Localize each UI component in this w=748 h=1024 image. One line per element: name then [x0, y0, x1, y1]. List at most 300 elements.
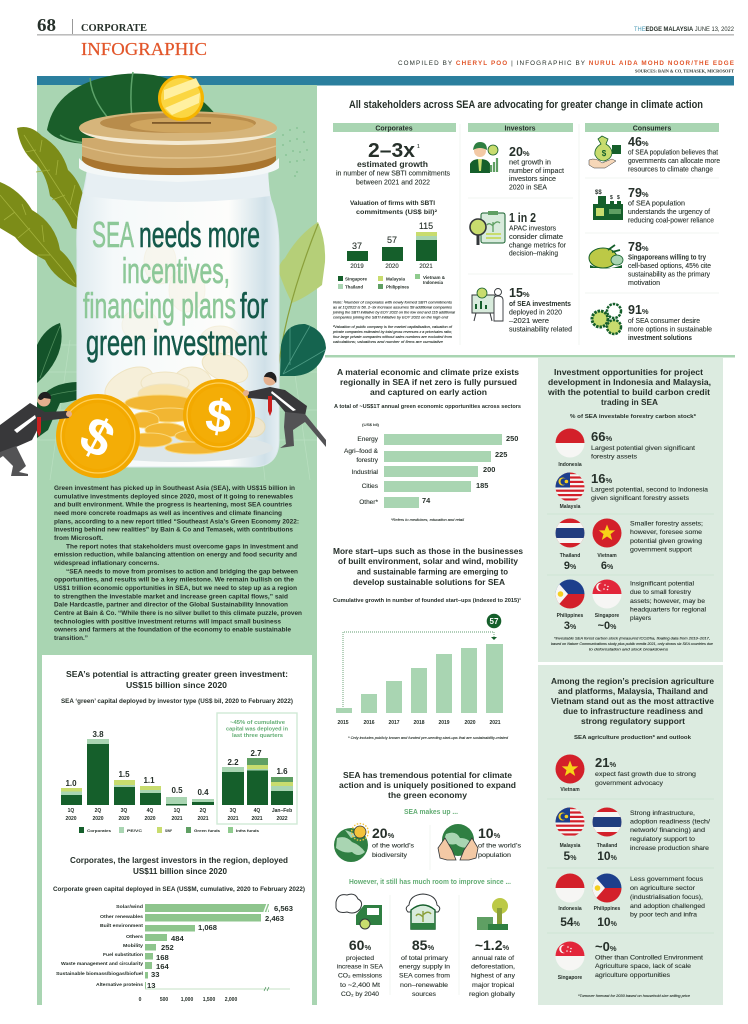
quarter labels: 2Q [95, 808, 101, 814]
bar chart: valuation: 115 [419, 221, 433, 231]
row: Malaysia and Thailand: Malaysia [560, 843, 581, 849]
heading [333, 546, 523, 587]
chart title [350, 200, 438, 216]
stat: 10% population [478, 825, 522, 859]
intro article text: Investing behind new realities” by Bain & Co and Temasek, with contributions [54, 527, 294, 534]
coin dropping into lid [158, 75, 204, 121]
businessman right [243, 372, 326, 448]
stat: growth: 2–3x [368, 140, 415, 162]
lid [79, 111, 279, 182]
stat: 60%: to ~2,400 Mt [340, 982, 380, 989]
heading: with the potential to build carbon credit [547, 387, 710, 397]
icon: investor with chart [470, 142, 498, 173]
publication and date: THEEDGE MALAYSIA JUNE 13, 2022 [634, 27, 735, 33]
stat: 15%: of SEA investments [509, 301, 571, 308]
bar chart: start-ups: 2015 [337, 720, 349, 726]
row: Thailand and Vietnam: Smaller forestry assets; [630, 520, 703, 528]
footnote: * Only includes publicly known and funded pre-seeding start-ups that are sustainability-related [348, 736, 509, 740]
row: Indonesia and Philippines: by poor tech and infra [630, 912, 697, 918]
stat: growth [336, 140, 450, 186]
main title [83, 214, 268, 363]
row: Malaysia and Thailand: network/ financing) and [630, 827, 705, 834]
illustration: jar of coins [0, 72, 326, 478]
stat: 1.2%: annual rate of [472, 955, 514, 962]
chart subtitle: Cumulative growth in number of founded start–ups (indexed to 2015)¹ [333, 597, 521, 604]
stat: 78% [628, 240, 711, 287]
legend: Philippines [386, 284, 410, 290]
bar chart: start-ups: 2020 [464, 720, 476, 726]
stat: 15%: –2021 were [509, 318, 549, 325]
chart subtitle: A total of ~US$1T annual green economic opportunities across sectors [334, 404, 521, 410]
stat: growth: estimated growth [357, 159, 428, 169]
subheading: % of SEA investable forestry carbon stock* [570, 414, 697, 420]
bar values: 252 [161, 943, 174, 952]
bar chart: start-ups: 2017 [388, 720, 400, 726]
stat: 10% population: 10% [478, 825, 501, 841]
row: Indonesia: 66% [591, 429, 612, 444]
icon: deforestation tree and bulldozer [477, 898, 508, 930]
intro article text: to strengthen the investable market and increase green capital flows,” said [54, 593, 288, 600]
intro article text: “SEA needs to move from promises to action and bridging the gap between [66, 568, 298, 575]
icon: factories: $ [610, 195, 613, 201]
bar values: 1.0 [65, 779, 77, 788]
bar chart: valuation: 2019 [350, 264, 364, 270]
row: Thailand and Vietnam: Thailand [560, 553, 580, 559]
stat: 1 in 2: APAC investors [509, 226, 556, 232]
quarter labels: 2021 [171, 816, 183, 822]
main title: incentives, [122, 250, 230, 291]
stat: 20% biodiversity: 20% [372, 825, 395, 841]
stat: 10% population: of the world’s [478, 842, 522, 850]
category labels: Mobility [123, 943, 144, 948]
stat: 85%: of total primary [401, 955, 449, 962]
row: Thailand and Vietnam: potential given growing [630, 538, 702, 545]
stat: 1.2%: region globally [469, 991, 516, 998]
stat: 46%: governments can allocate more [628, 158, 720, 165]
legend: Indonesia [423, 280, 444, 285]
bar chart: sectors: 74 [422, 496, 431, 505]
stat: 1 in 2: 1 in 2 [509, 211, 536, 225]
axis labels: 1,500 [203, 997, 215, 1003]
icon: roast chicken [589, 245, 623, 268]
stat: 78%: motivation [628, 280, 660, 287]
legend: SWF [165, 828, 172, 833]
jar [77, 172, 279, 467]
stacked bar chart [61, 730, 293, 822]
stat: 60%: projected [346, 955, 374, 962]
stat: 1 in 2: decision–making [509, 250, 558, 258]
stat: 85%: non–renewable [400, 982, 448, 989]
icon: factories: $$ [595, 190, 602, 196]
legend: Singapore [345, 276, 368, 282]
stat: 1.2%: highest of any [471, 972, 516, 980]
footnotes [332, 300, 455, 344]
intro article text: The report notes that stakeholders must overcome gaps in investment and [66, 543, 298, 550]
bar chart: sectors: 225 [495, 450, 507, 459]
quarter labels: 1Q [68, 808, 74, 814]
icon: presentation board [472, 288, 503, 321]
heading [66, 669, 288, 690]
leaf: olive upper [17, 127, 88, 232]
category labels [56, 904, 144, 987]
callout: 57 [487, 614, 501, 628]
quarter labels: 2020 [118, 816, 130, 822]
row: Vietnam: expect fast growth due to strong [595, 771, 696, 778]
coin: left big [56, 394, 140, 478]
row: Philippines and Singapore [555, 579, 706, 632]
bar chart: sectors: 185 [476, 481, 488, 490]
category labels: Fuel substitution [103, 952, 143, 957]
footnote: *Investable SEA forest carbon stock (measured tCO2/ha, floating data from 2019–2017, [554, 636, 710, 640]
category labels: Waste management and circularity [61, 961, 143, 966]
leaf: teal right [280, 324, 326, 376]
column header [468, 123, 573, 132]
callout: last three quarters: ~45% of cumulative [230, 720, 285, 726]
intro article text: and built environment. While the progress is heartening, most SEA countries [54, 502, 293, 509]
stat: 91% [628, 303, 712, 342]
main title: financing plans [83, 285, 236, 326]
row: Malaysia and Thailand: adoption readiness (tech/ [630, 818, 710, 826]
stat: 1 in 2: consider climate [509, 234, 563, 241]
credits: COMPILED BY CHERYL POO | INFOGRAPHIC BY NURUL AIDA MOHD NOOR/THE EDGE [398, 60, 734, 67]
leaf: olive lower [0, 182, 78, 288]
bar values: 164 [156, 962, 169, 971]
heading: action and is uniquely positioned to expand [339, 780, 516, 790]
row: Malaysia and Thailand: 5% [564, 849, 577, 863]
stat: 85%: energy supply in [399, 964, 450, 970]
row: Philippines and Singapore: Singapore [595, 613, 619, 619]
stat: 79%: understands the urgency of [628, 209, 710, 216]
quarter labels: 2021 [251, 816, 263, 822]
intro article text: widespread inflationary concerns. [53, 560, 159, 567]
legend: Thailand [345, 284, 363, 290]
row: Philippines and Singapore: headquarters for regional [630, 606, 706, 614]
stat: 15%: sustainability related [509, 326, 572, 334]
legend: Corporates [87, 828, 112, 833]
row: Thailand and Vietnam: Vietnam [597, 553, 617, 559]
row: Singapore: Agriculture space, lack of scale [595, 963, 691, 970]
row: Thailand and Vietnam: however, foresee some [630, 529, 702, 536]
heading: and platforms, Malaysia, Thailand and [558, 686, 708, 696]
bar chart: start-ups [336, 614, 503, 726]
bar chart: start-ups: 2018 [413, 720, 425, 726]
footnotes: four large private companies without sales numbers are excluded from [333, 335, 452, 339]
column: corporates [332, 123, 456, 344]
row: Malaysia and Thailand [555, 807, 710, 863]
panel: precision agriculture [538, 665, 723, 1005]
row: Indonesia and Philippines: on agriculture sector [630, 885, 696, 892]
bar values: 2,463 [265, 914, 284, 923]
stat: 85% [399, 937, 450, 998]
bar chart: start-ups: 2019 [438, 720, 450, 726]
heading: SEA’s potential is attracting greater green investment: [66, 669, 288, 679]
row: Philippines and Singapore: Philippines [557, 613, 584, 619]
quarter labels: 2020 [144, 816, 156, 822]
quarter labels [65, 808, 292, 822]
chart title: Valuation of firms with SBTI [350, 200, 435, 207]
heading: and captured on early action [370, 387, 487, 397]
subheading: SEA agriculture production* and outlook [574, 735, 692, 741]
row: Malaysia: Malaysia [560, 504, 581, 510]
page number: 68 [37, 15, 56, 35]
icon: hand with money bag: $ [602, 149, 607, 158]
row: Indonesia: forestry assets [591, 454, 638, 460]
footnotes: joining the SBTI initiative by EOY 2022 on the low end and 116 additional [332, 310, 455, 314]
heading [547, 367, 711, 407]
stat: 20%: number of impact [509, 168, 564, 175]
heading: develop sustainable solutions for SEA [353, 577, 506, 587]
chart subtitle: SEA ‘green’ capital deployed by investor type (US$ bil, 2020 to February 2022) [61, 699, 293, 705]
main title: for [240, 285, 268, 326]
axis labels: 0 [139, 997, 142, 1003]
heading: development in Indonesia and Malaysia, [548, 377, 711, 387]
coin: right big [183, 379, 255, 451]
intro article text: US$1 trillion economic opportunities in SEA, but we need to step up as a region [54, 585, 297, 592]
intro article text: Dale Hardcastle, partner and director of the Global Sustainability Innovation [54, 602, 288, 609]
category labels: Built environment [100, 923, 144, 928]
bar chart: start-ups: 2021 [489, 720, 501, 726]
quarter labels: 2021 [227, 816, 239, 822]
stat: 78%: 78% [628, 240, 649, 254]
panel: economic prize [334, 367, 521, 522]
row: Vietnam: government advocacy [595, 780, 664, 787]
chart subtitle: Corporate green capital deployed in SEA (US$M, cumulative, 2020 to February 2022) [53, 887, 305, 893]
panel: stakeholders [332, 99, 720, 345]
coin: right big: $ [203, 388, 235, 444]
bar values: 3.8 [92, 730, 104, 739]
quarter labels: 4Q [147, 808, 153, 814]
stat: 1 in 2 [509, 211, 567, 258]
footnote: *Turnover forecast for 2030 based on household size selling price [578, 994, 690, 998]
quarter labels: 1Q [174, 808, 180, 814]
legend: Vietnam & [423, 275, 446, 280]
leaf: large dark [47, 72, 224, 150]
heading: Investment opportunities for project [554, 367, 703, 377]
heading: due to infrastructure readiness and [563, 706, 703, 716]
bar chart: valuation: 2021 [419, 264, 433, 270]
icon: factories: $ [617, 195, 620, 201]
bar values: 1.6 [276, 767, 288, 776]
bar values: 2.7 [250, 749, 262, 758]
footnote [551, 636, 713, 652]
row: Singapore: agriculture opportunities [595, 972, 671, 979]
panel: climate action potential [334, 770, 522, 998]
footnotes: as at 1Q2022 is 58. 2–3x increase assumes 58 additional companies [333, 306, 452, 310]
subheading: SEA makes up ... [404, 809, 458, 816]
main title: SEA [92, 214, 134, 255]
stat: 79%: reducing coal-power reliance [628, 218, 714, 224]
heading: A material economic and climate prize exists [337, 367, 519, 377]
businessman left [0, 392, 72, 476]
stat: 91%: of SEA consumer desire [628, 318, 700, 325]
row: Malaysia and Thailand: Strong infrastructure, [630, 810, 695, 817]
faded coins in jar [99, 240, 252, 410]
quarter labels: 2020 [92, 816, 104, 822]
bar chart: valuation: 2020 [385, 264, 399, 270]
callout: last three quarters: capital was deployed in [226, 726, 288, 732]
legend: Green funds [194, 828, 221, 833]
quarter labels: 4Q [254, 808, 260, 814]
quarter labels: 2022 [276, 816, 288, 822]
intro article text: transition.” [54, 635, 88, 642]
bar chart: sectors: Other* [359, 499, 378, 506]
row: Indonesia: Largest potential given significant [591, 445, 695, 452]
row: Singapore: Singapore [558, 975, 582, 981]
bar values [65, 730, 288, 797]
stat: 85%: 85% [412, 937, 434, 953]
icon: globe with sun [334, 824, 368, 862]
leaf: dark left [37, 323, 104, 438]
icon: hands holding globe [438, 824, 478, 860]
stat: 60%: CO₂ emissions [338, 972, 383, 980]
stat: 46%: resources to climate change [628, 166, 713, 174]
stat: 85%: SEA comes from [399, 972, 450, 980]
bar chart: valuation: 37 [352, 241, 362, 251]
leaf: pale palm [278, 222, 325, 372]
intro article text: owners and farmers at the foundation of the economy to enable sustainable [54, 627, 292, 634]
stat: 91%: 91% [628, 303, 649, 317]
callout: last three quarters [217, 713, 297, 824]
intro article text: from Microsoft. [54, 535, 103, 542]
bar values [147, 904, 293, 990]
stat: 20% biodiversity: of the world’s [372, 842, 415, 850]
stat: 79% [628, 186, 714, 224]
intro article text: emission reduction, while balancing attention on energy and food security and [54, 552, 297, 559]
row: Indonesia and Philippines: Less government focus [630, 876, 704, 883]
quarter labels: 2020 [65, 816, 77, 822]
intro article text: technologies with positive investment returns will impact small business [54, 618, 282, 625]
bar values: 0.5 [171, 786, 183, 795]
section label: CORPORATE [81, 23, 147, 34]
column header [585, 123, 719, 132]
row: Malaysia and Thailand: 10% [597, 849, 618, 863]
stat: 20%: net growth in [509, 160, 551, 166]
quarter labels: 3Q [121, 808, 127, 814]
footnotes: private companies estimated by total gross revenues x a price/sales ratio; [332, 330, 452, 334]
row: Malaysia and Thailand: regulatory support to [630, 836, 695, 843]
row: Vietnam: Vietnam [560, 787, 580, 793]
intro article text: Centre at Bain & Co. “While there is no silver bullet to this climate puzzle, proven [54, 610, 302, 617]
row: Indonesia: Indonesia [558, 462, 582, 468]
column header: Investors [504, 126, 536, 132]
stat: 46%: of SEA population believes that [628, 150, 718, 156]
intro article text: cumulative investments deployed since 2020, most of it going to renewables [54, 493, 294, 500]
quarter labels: Jan–Feb [272, 808, 292, 814]
heading: US$15 billion since 2020 [126, 680, 227, 690]
heading: Among the region’s precision agriculture [551, 676, 714, 686]
category labels: Alternative proteins [96, 982, 143, 987]
bar chart: sectors: Cities [362, 483, 379, 490]
infographic label: INFOGRAPHIC [81, 39, 207, 59]
category labels: Other renewables [100, 914, 143, 919]
row: Thailand and Vietnam [555, 518, 703, 572]
bar chart: start-ups: 2016 [363, 720, 375, 726]
heading: strong regulatory support [581, 716, 685, 726]
horizontal bar chart [56, 904, 293, 1003]
footnotes: Note: ¹Number of corporates with newly formed SBTI commitments [333, 300, 452, 304]
stat: 46% [628, 135, 720, 174]
stat: 20%: investors since [509, 176, 556, 183]
stat: 15%: deployed in 2020 [509, 310, 562, 316]
column: investors [468, 123, 573, 334]
bar chart: sectors [344, 423, 518, 508]
heading: Corporates, the largest investors in the region, deployed [70, 855, 288, 865]
row: Indonesia and Philippines: 10% [597, 915, 618, 929]
coin: left big: $ [71, 405, 124, 470]
footnotes: calculations; valuations and number of firms are cumulative [333, 340, 443, 344]
axis labels [139, 997, 237, 1003]
heading: More start–ups such as those in the businesses [333, 546, 523, 556]
row: Philippines and Singapore: due to small forestry [630, 589, 692, 596]
heading: SEA has tremendous potential for climate [343, 770, 512, 780]
bar values: 2.2 [227, 758, 239, 767]
footnotes: ²Valuation of public company is the market capitalisation, valuation of [333, 325, 453, 329]
stat: 60% [337, 937, 383, 998]
stat: 91%: more options in sustainable [628, 326, 712, 334]
panel: corporate green capital [53, 855, 305, 1003]
heading: of built environment, solar and wind, mobility [338, 556, 518, 566]
intro article text: need more concrete roadmaps as well as incentives and climate financing [54, 510, 282, 517]
footnote: *Refers to medicines, education and retail [391, 518, 464, 522]
stat: 1.2%: deforestation, [471, 964, 515, 970]
column header: Corporates [375, 126, 413, 132]
stat: 79%: 79% [628, 186, 649, 200]
stat: 1.2%: major tropical [472, 982, 515, 989]
bar values: 1.5 [118, 770, 130, 779]
row: Philippines and Singapore: Insignificant potential [630, 580, 694, 588]
row: Malaysia: Largest potential, second to Indonesia [591, 486, 708, 494]
bar values: 0.4 [197, 788, 209, 797]
quarter labels: 2021 [197, 816, 209, 822]
stat: 78%: Singaporeans willing to try [628, 254, 706, 262]
stat: 78%: cell-based options, 45% cite [628, 263, 711, 270]
stat: growth: 1 [417, 144, 420, 150]
main title: needs more [139, 214, 260, 255]
heading [337, 367, 519, 397]
category labels: Others [126, 934, 144, 939]
stat: 20% [509, 145, 564, 192]
quarter labels: 2Q [200, 808, 206, 814]
panel: hero and intro [0, 72, 326, 1005]
panel: start-ups [333, 546, 523, 740]
bar chart: sectors: forestry [356, 457, 379, 464]
bar chart: sectors: Agri–food & [344, 448, 379, 455]
stat: 60%: CO₂ by 2040 [341, 991, 379, 998]
quarter labels: 3Q [230, 808, 236, 814]
sources: SOURCES: BAIN & CO, TEMASEK, MICROSOFT [635, 68, 734, 74]
column: consumers [585, 123, 720, 342]
row: Singapore: Other than Controlled Environment [595, 954, 703, 962]
dot pattern [282, 127, 308, 177]
stat: 91%: investment solutions [628, 335, 692, 342]
axis labels: 2,000 [225, 997, 237, 1003]
panel: green capital by investor type [61, 669, 297, 833]
bar values: 1.1 [143, 776, 155, 785]
intro article text: Green investment has picked up in Southeast Asia (SEA), with US$15 billion in [54, 485, 295, 492]
subheading: However, it still has much room to improve since ... [349, 879, 511, 886]
intro article text [53, 485, 302, 642]
masthead [37, 15, 735, 74]
bar values: 33 [151, 970, 159, 979]
row: Philippines and Singapore: players [630, 615, 652, 622]
bar values: 168 [156, 953, 169, 962]
stat: 20% biodiversity: biodiversity [372, 852, 408, 859]
stat: 20%: 20% [509, 145, 530, 159]
row: Indonesia and Philippines: and adoption challenged [630, 903, 705, 910]
heading: US$11 billion since 2020 [133, 866, 227, 876]
intro article text: opportunities, and results will be a key milestone. We remain bullish on the [54, 577, 295, 584]
footnote: based on Nature Communications study plus public media 2021, only shows six SEA countries due [551, 642, 713, 646]
